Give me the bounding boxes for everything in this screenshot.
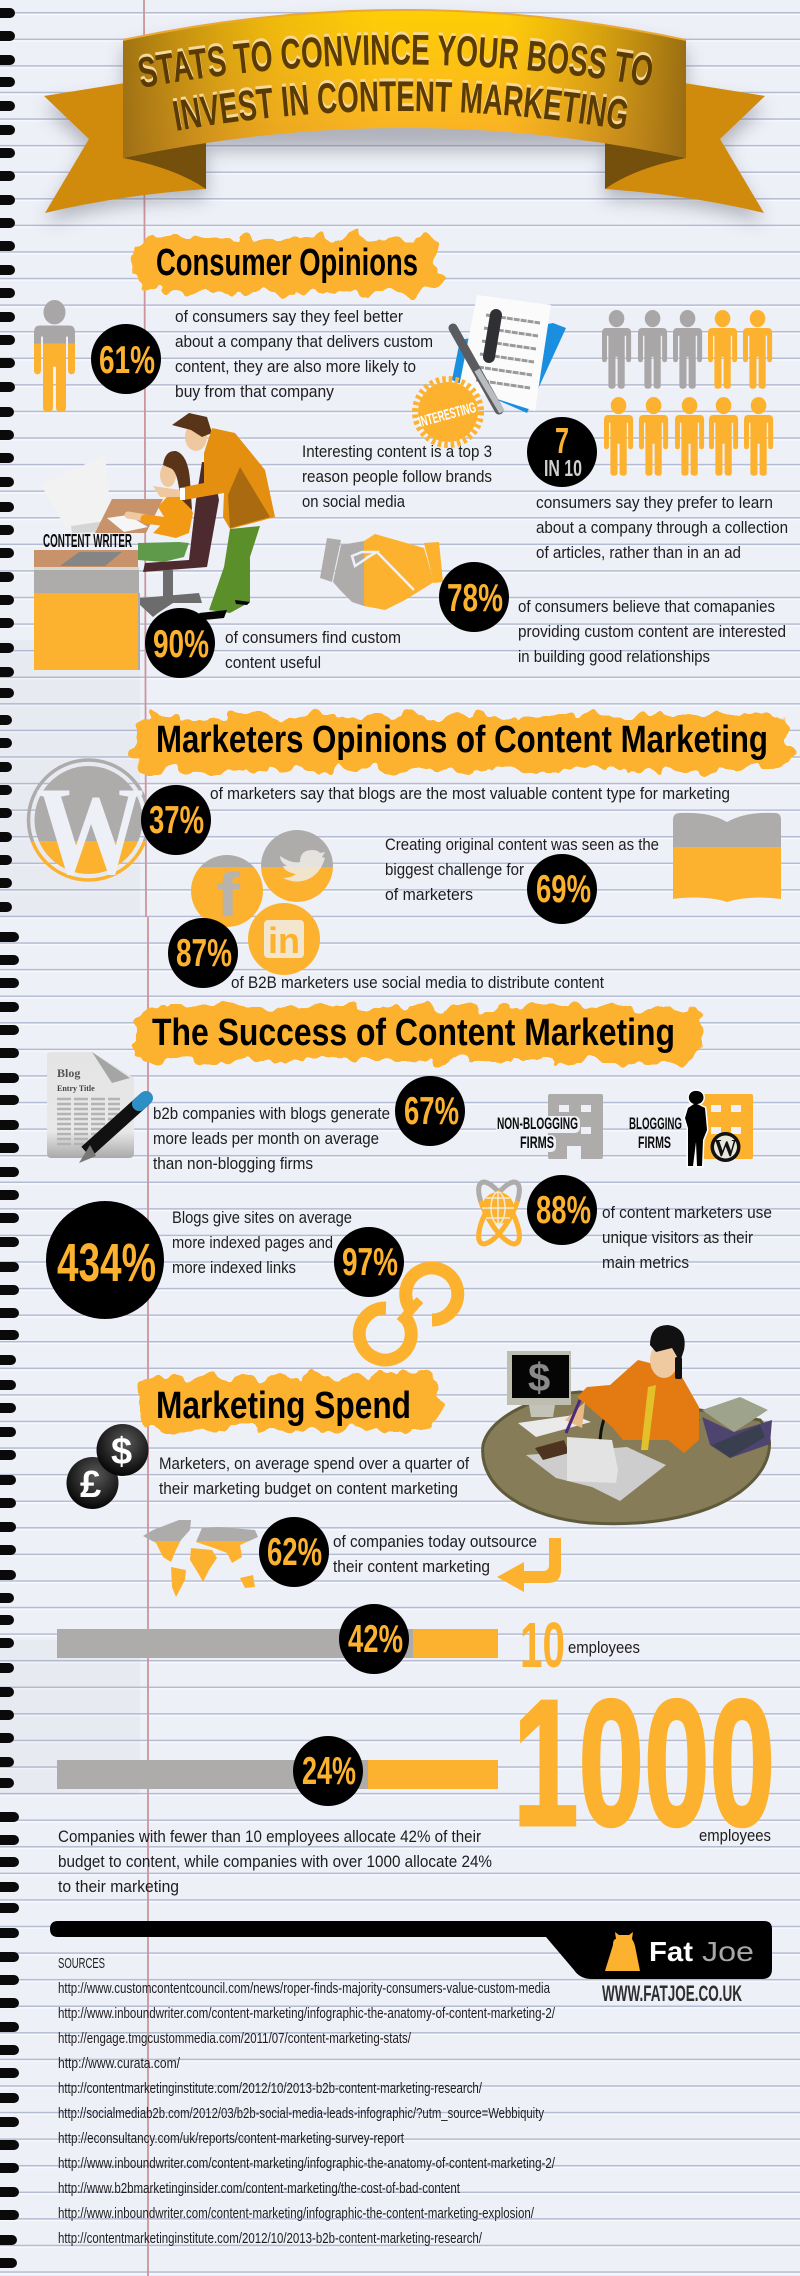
heading: The Success of Content Marketing xyxy=(136,1007,703,1061)
stat: 90% xyxy=(145,608,215,678)
icon: non-blogging firms building: FIRMS xyxy=(520,1133,554,1152)
icon: blog document with pen: Blog xyxy=(57,1066,80,1080)
title ribbon banner xyxy=(43,9,766,228)
banner title text: INVEST IN CONTENT MARKETING xyxy=(172,78,628,128)
icon: open book xyxy=(673,813,781,902)
text: 37% of marketers: of marketers say that blogs are the most valuable content type for marketing xyxy=(210,784,730,803)
text: interesting content: Interesting content is a top 3 xyxy=(302,442,492,461)
text: creating original content: of marketers xyxy=(385,885,473,904)
stat: 62%: 62% xyxy=(267,1531,322,1574)
stat: 434%: 434% xyxy=(57,1233,156,1293)
text: blogs give sites: more indexed pages and xyxy=(172,1233,333,1252)
heading: Consumer Opinions: Consumer Opinions xyxy=(156,242,418,284)
icon: chain links xyxy=(359,1268,458,1360)
stat: 97% xyxy=(334,1227,404,1297)
stat: 97%: 97% xyxy=(342,1241,398,1284)
stat: 7 in 10 xyxy=(527,417,597,487)
text: 7 in 10 consumers xyxy=(536,493,788,562)
text: 88% of content marketers: unique visitors as their xyxy=(602,1228,753,1247)
icon: blogging firms building: W xyxy=(714,1136,737,1162)
text: b2b companies: b2b companies with blogs generate xyxy=(153,1104,390,1123)
stat: 88%: 88% xyxy=(536,1189,591,1232)
icon: blog document with pen xyxy=(47,1052,146,1163)
text: 7 in 10 consumers: consumers say they prefer to learn xyxy=(536,493,773,512)
sources list: http://www.inboundwriter.com/content-marketing/infographic-the-content-marketing-explosion/ xyxy=(58,2206,535,2222)
illustration: content writer at desk xyxy=(34,413,275,670)
text: 78% of consumers: of consumers believe that comapanies xyxy=(518,597,775,616)
icon: linkedin: in xyxy=(268,920,300,961)
text: 88% of content marketers: main metrics xyxy=(602,1253,689,1272)
icon: blogging firms building: FIRMS xyxy=(638,1133,671,1152)
stat: 67% xyxy=(395,1076,465,1146)
footer bar with Fat Joe logo: Joe xyxy=(702,1936,754,1967)
stat: 78% xyxy=(439,562,509,632)
banner title text: STATS TO CONVINCE YOUR BOSS TO xyxy=(138,32,652,82)
icon: blogging firms building: BLOGGING xyxy=(629,1114,682,1133)
icon: handshake xyxy=(320,534,443,610)
text: 88% of content marketers: of content marketers use xyxy=(602,1203,772,1222)
text: companies summary: Companies with fewer than 10 employees allocate 42% of their xyxy=(58,1827,481,1846)
text: interesting content xyxy=(302,442,492,511)
text: 7 in 10 consumers: of articles, rather than in an ad xyxy=(536,543,741,562)
arrow: curved return xyxy=(497,1538,561,1592)
banner title text xyxy=(138,32,652,131)
stat: 87%: 87% xyxy=(176,932,232,975)
text: interesting content: reason people follow brands xyxy=(302,467,492,486)
people grid: 7 in 10 xyxy=(602,310,773,476)
stat: 62% xyxy=(259,1517,329,1587)
bar: 24% thousand employees: employees xyxy=(699,1826,771,1845)
text: creating original content: Creating original content was seen as the xyxy=(385,835,659,854)
sources list: http://econsultancy.com/uk/reports/content-marketing-survey-report xyxy=(58,2131,404,2147)
heading: Marketing Spend: Marketing Spend xyxy=(156,1385,411,1427)
icon: document and pens xyxy=(452,295,566,413)
icon: pound and dollar coins: $ xyxy=(111,1431,132,1473)
text: companies summary xyxy=(58,1827,492,1896)
sources list: http://www.customcontentcouncil.com/news/roper-finds-majority-consumers-value-custom-media xyxy=(58,1981,551,1997)
text: 90% of consumers xyxy=(225,628,401,672)
sources list: http://www.curata.com/ xyxy=(58,2056,181,2072)
stat: 37%: 37% xyxy=(149,799,204,842)
icon: twitter xyxy=(261,830,333,902)
bar: 24% thousand employees: 24% xyxy=(302,1750,356,1793)
heading: Marketing Spend xyxy=(137,1376,439,1430)
sources list: SOURCES xyxy=(58,1956,105,1972)
text: blogs give sites: more indexed links xyxy=(172,1258,296,1277)
text: marketers on average xyxy=(159,1454,469,1498)
sources list: http://www.inboundwriter.com/content-marketing/infographic-the-anatomy-of-content-marketing-2/ xyxy=(58,2006,556,2022)
icon: non-blogging firms building xyxy=(496,1094,603,1159)
text: 61% of consumers: buy from that company xyxy=(175,382,334,401)
banner title text: INVEST IN CONTENT MARKETING xyxy=(172,81,628,131)
icon: WordPress logo: W xyxy=(36,762,144,901)
text: 62% of companies: their content marketing xyxy=(333,1557,490,1576)
stat: 88% xyxy=(527,1175,597,1245)
bar: 42% ten employees xyxy=(57,1604,640,1681)
text: b2b companies: more leads per month on average xyxy=(153,1129,379,1148)
icon: atom globe xyxy=(471,1177,527,1249)
stat: 90%: 90% xyxy=(153,623,209,666)
sources list: http://socialmediab2b.com/2012/03/b2b-social-media-leads-infographic/?utm_source=Webbiquity xyxy=(58,2106,545,2122)
sources list: http://contentmarketinginstitute.com/2012/10/2013-b2b-content-marketing-research/ xyxy=(58,2231,483,2247)
bar: 42% ten employees: employees xyxy=(568,1638,640,1657)
text: 61% of consumers xyxy=(175,307,433,401)
badge: interesting starburst: INTERESTING xyxy=(417,399,478,431)
stat: 61% person icon: 61% xyxy=(99,339,155,382)
text: 61% of consumers: about a company that delivers custom xyxy=(175,332,433,351)
text: marketers on average: their marketing budget on content marketing xyxy=(159,1479,458,1498)
stat: 87% xyxy=(168,918,238,988)
icon: Fat Joe mascot xyxy=(605,1932,640,1971)
text: 78% of consumers: in building good relationships xyxy=(518,647,710,666)
illustration: man on phone at desk: $ xyxy=(528,1356,550,1400)
text: creating original content: biggest challenge for xyxy=(385,860,524,879)
text: creating original content xyxy=(385,835,659,904)
text: 90% of consumers: content useful xyxy=(225,653,321,672)
text: marketers on average: Marketers, on average spend over a quarter of xyxy=(159,1454,469,1473)
bar: 24% thousand employees xyxy=(57,1663,775,1864)
stat: 69% xyxy=(527,854,597,924)
text: blogs give sites xyxy=(172,1208,352,1277)
stat: 434% xyxy=(46,1201,164,1319)
sources list: http://contentmarketinginstitute.com/2012/10/2013-b2b-content-marketing-research/ xyxy=(58,2081,483,2097)
sources list: http://www.b2bmarketinginsider.com/content-marketing/the-cost-of-bad-content xyxy=(58,2181,460,2197)
icon: facebook xyxy=(191,855,263,930)
stat: 67%: 67% xyxy=(404,1090,459,1133)
footer bar with Fat Joe logo xyxy=(50,1921,772,1979)
banner title text: STATS TO CONVINCE YOUR BOSS TO xyxy=(138,34,652,87)
stat: 69%: 69% xyxy=(536,868,591,911)
icon: non-blogging firms building: NON-BLOGGING xyxy=(497,1114,578,1133)
footer bar with Fat Joe logo: Fat xyxy=(649,1936,693,1967)
text: 61% of consumers: content, they are also more likely to xyxy=(175,357,416,376)
sources list: http://engage.tmgcustommedia.com/2011/07/content-marketing-stats/ xyxy=(58,2031,412,2047)
stat: 7 in 10: 7 xyxy=(555,420,569,461)
text: companies summary: to their marketing xyxy=(58,1877,179,1896)
icon: linkedin xyxy=(248,903,320,975)
stat: 61% person icon xyxy=(34,300,161,412)
icon: pound and dollar coins xyxy=(66,1424,148,1509)
bar: 42% ten employees: 10 xyxy=(520,1609,565,1681)
label: content writer: CONTENT WRITER xyxy=(43,531,132,551)
sources list: http://www.inboundwriter.com/content-marketing/infographic-the-anatomy-of-content-marketing-2/ xyxy=(58,2156,556,2172)
icon: pound and dollar coins: £ xyxy=(80,1464,101,1506)
text: 87% of B2B marketers: of B2B marketers use social media to distribute content xyxy=(231,973,604,992)
icon: world map xyxy=(143,1520,258,1597)
bar: 42% ten employees: 42% xyxy=(348,1618,403,1661)
icon: blogging firms building xyxy=(629,1091,753,1166)
sources list xyxy=(58,1956,556,2247)
text: b2b companies: than non-blogging firms xyxy=(153,1154,313,1173)
text: 88% of content marketers xyxy=(602,1203,772,1272)
text: interesting content: on social media xyxy=(302,492,405,511)
text: 61% of consumers: of consumers say they feel better xyxy=(175,307,403,326)
badge: interesting starburst xyxy=(415,379,481,445)
stat: 78%: 78% xyxy=(447,577,503,620)
text: b2b companies xyxy=(153,1104,390,1173)
stat: 37% xyxy=(141,785,211,855)
text: blogs give sites: Blogs give sites on average xyxy=(172,1208,352,1227)
heading: Consumer Opinions xyxy=(135,238,437,292)
text: 78% of consumers xyxy=(518,597,786,666)
icon: facebook: f xyxy=(216,861,240,930)
text: 62% of companies: of companies today outsource xyxy=(333,1532,537,1551)
icon: blog document with pen: Entry Title xyxy=(57,1084,95,1093)
stat: 7 in 10: IN 10 xyxy=(544,455,582,481)
text: companies summary: budget to content, while companies with over 1000 allocate 24% xyxy=(58,1852,492,1871)
heading: The Success of Content Marketing: The Success of Content Marketing xyxy=(152,1012,675,1054)
illustration: man on phone at desk xyxy=(483,1325,772,1524)
text: 62% of companies xyxy=(333,1532,537,1576)
text: 90% of consumers: of consumers find custom xyxy=(225,628,401,647)
